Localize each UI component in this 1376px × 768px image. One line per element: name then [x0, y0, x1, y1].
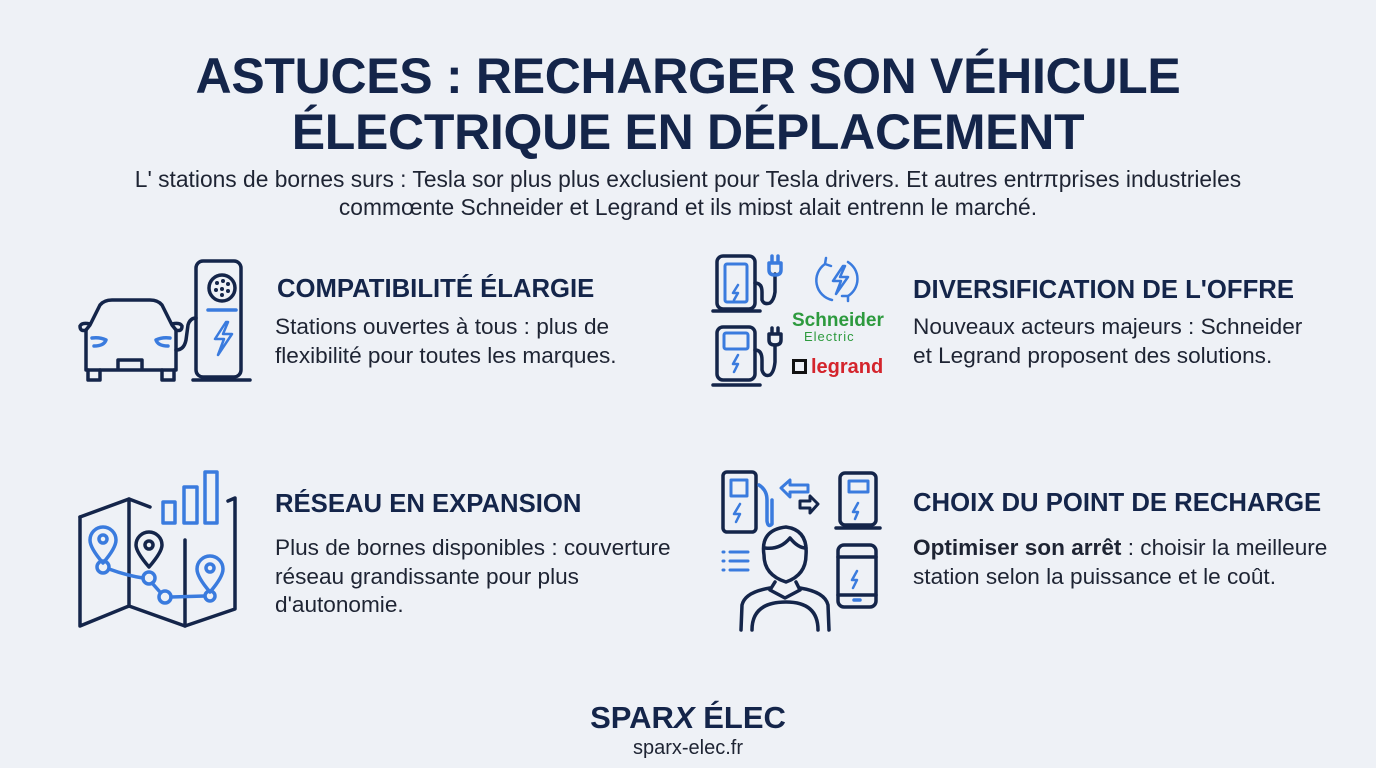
icon: map with pins and bars: [78, 470, 237, 628]
text: et Legrand proposent des solutions.: [913, 342, 1272, 368]
icon: driver choosing stations: [721, 470, 882, 632]
text: [913, 314, 1302, 368]
footer logo: SPARX ÉLEC: [590, 700, 786, 735]
text: Stations ouvertes à tous : plus de: [275, 314, 609, 339]
text: [913, 535, 1327, 588]
subtitle: L' stations de bornes surs : Tesla sor plus plus exclusient pour Tesla drivers. Et autres entrπprises industrieles: [135, 166, 1241, 192]
logo: legrand: legrand: [811, 356, 883, 378]
panel: réseau: [78, 470, 671, 628]
subtitle: [135, 166, 1241, 220]
text: station selon la puissance et le coût.: [913, 564, 1276, 588]
panel: diversification: [711, 254, 1302, 387]
title: ÉLECTRIQUE EN DÉPLACEMENT: [292, 104, 1084, 160]
text: Optimiser son arrêt : choisir la meilleure: [913, 535, 1327, 560]
logo: Schneider Electric: Schneider: [792, 310, 884, 331]
heading: RÉSEAU EN EXPANSION: [275, 490, 581, 518]
text: d'autonomie.: [275, 592, 404, 617]
title: [196, 48, 1180, 160]
icon: stations and brand logos: [711, 254, 859, 387]
icon: car and charging station: [78, 259, 252, 382]
text: Plus de bornes disponibles : couverture: [275, 535, 671, 560]
text: [275, 314, 617, 368]
footer logo: sparx-elec.fr: [633, 737, 743, 759]
text: réseau grandissante pour plus: [275, 564, 579, 588]
heading: COMPATIBILITÉ ÉLARGIE: [277, 275, 594, 303]
text: Nouveaux acteurs majeurs : Schneider: [913, 314, 1302, 339]
panel: compatibilité: [78, 259, 617, 382]
text: flexibilité pour toutes les marques.: [275, 342, 617, 368]
subtitle: commœnte Schneider et Legrand et ils miɒst alait entrenn le marché.: [339, 194, 1037, 220]
logo: Schneider Electric: Electric: [804, 329, 855, 344]
heading: DIVERSIFICATION DE L'OFFRE: [913, 276, 1294, 304]
footer logo: [590, 700, 786, 759]
text: [275, 535, 671, 617]
logo: Schneider Electric: [792, 310, 884, 344]
title: ASTUCES : RECHARGER SON VÉHICULE: [196, 48, 1180, 104]
heading: CHOIX DU POINT DE RECHARGE: [913, 489, 1321, 517]
panel: choix du point: [721, 470, 1327, 632]
